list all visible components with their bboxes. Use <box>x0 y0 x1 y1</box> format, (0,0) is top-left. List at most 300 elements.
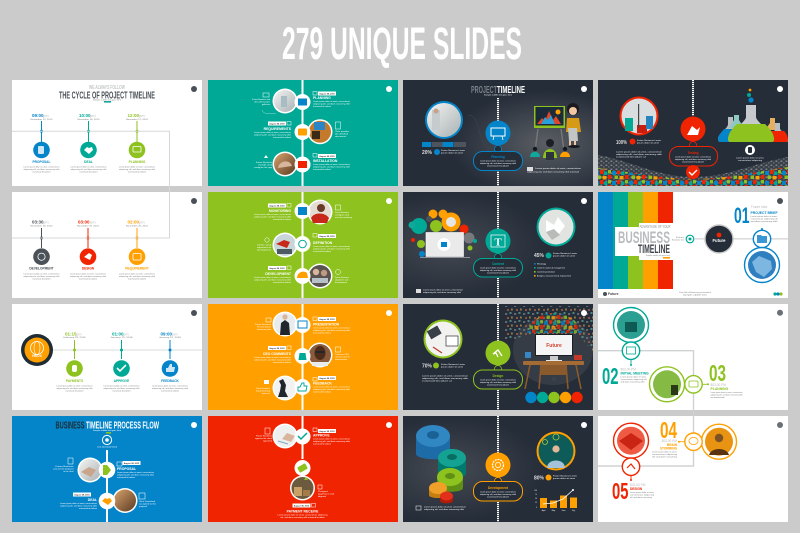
design pill: adipiscing elit, sed diam nonummy nibh <box>480 381 516 384</box>
milestone: design: November 19, 2015 <box>77 225 100 227</box>
logo badge <box>705 225 733 253</box>
milestone: deal: Lorem ipsum dolor sit amet, consectetuer <box>70 166 107 168</box>
planning pill: adipiscing elit, sed diam nonummy nibh <box>480 162 516 165</box>
testing pill: Testing <box>687 151 699 155</box>
milestone: proposal: euismod tincidunt <box>32 170 51 174</box>
step: feedback: Lorem ipsum dolor sit amet, consectetuer <box>313 386 350 388</box>
step: installation: Lorem ipsum dolor sit amet, consectetuer <box>313 163 350 166</box>
step: approve: APPROVE <box>313 434 330 438</box>
milestone: approve: adipiscing elit, sed diam nonummy nibh <box>104 387 140 390</box>
small teal icon: Future <box>676 236 685 239</box>
footer: Your look of Business presentation <box>679 291 711 294</box>
illustration: desk and monitor: Future <box>546 343 562 349</box>
panel: design slide <box>403 304 593 410</box>
step: ceo comments: adipiscing elit, sed diam nonummy nibh <box>254 358 291 362</box>
step: ceo comments: Customer CEO <box>335 353 349 356</box>
panel: teal timeline slide <box>208 80 398 186</box>
slide heading: BUSINESS <box>56 420 85 432</box>
settings dot <box>581 310 587 316</box>
step: proposal: to the client <box>64 470 74 473</box>
step: development: August 08, 2015 <box>269 267 285 270</box>
step: monitoring: configure and <box>335 214 349 216</box>
milestone: proposal: 09:00 <box>32 113 44 118</box>
cover title card: TIMELINE <box>638 244 670 256</box>
milestone: requirement: euismod tincidunt <box>128 278 146 280</box>
milestone: design: Lorem ipsum dolor sit amet, consectetuer <box>70 272 106 276</box>
step: deal: August 08, 2015 <box>74 494 90 496</box>
step: approve: approve the client <box>255 437 272 440</box>
step: proposal: adipiscing elit, sed diam nonummy nibh <box>117 474 154 476</box>
milestone: feedback: adipiscing elit, sed diam nonummy nibh <box>152 387 188 390</box>
percent and text: adipiscing elit, sed diam nonummy nibh <box>422 377 468 380</box>
step: requirements: adipiscing elit, sed diam nonummy nibh <box>254 134 291 136</box>
slide heading: TIMELINE PROCESS FLOW <box>86 420 159 432</box>
milestone: feedback: Lorem ipsum dolor sit amet, consectetuer <box>152 384 188 388</box>
start icon <box>97 435 117 448</box>
percent and list: Content creation & management <box>537 267 565 270</box>
small teal icon <box>672 235 694 243</box>
project brief heading: Lorem ipsum dolor sit amet, <box>750 215 778 218</box>
illustration: presenter and board <box>534 103 581 151</box>
settings dot <box>386 86 392 92</box>
step: planning: PLANNING <box>313 96 331 100</box>
percent and text: euismod tincidunt ut <box>422 380 453 382</box>
step 04: brain storming: $03.00 PM <box>662 439 677 443</box>
step: monitoring: Lorem ipsum dolor sit amet, consectetuer <box>254 213 291 216</box>
percent: ipsum dolor sit amet <box>553 477 576 480</box>
step: feedback: process <box>262 393 270 395</box>
caption: adipiscing elit, sed diam nonummy nibh <box>424 508 464 511</box>
slide heading: PROJECT <box>471 85 497 96</box>
percent and text <box>616 138 662 158</box>
step: planning: Future Business and <box>252 98 270 101</box>
milestone: payments: 01:15 <box>65 332 77 336</box>
milestone: planning <box>119 113 155 174</box>
panel: initial meeting and planning slide <box>598 304 788 410</box>
illustration: icon cloud <box>505 306 593 352</box>
start icon: Link download Used <box>97 446 117 448</box>
bar chart: 50 <box>535 498 537 500</box>
step: definition: adjustment of <box>257 246 272 249</box>
step: planning: plan <box>262 104 270 106</box>
step: ceo comments: demonstration <box>335 358 347 361</box>
milestone: proposal: adipiscing elit, sed diam nonummy nibh <box>24 168 60 171</box>
percent and list <box>534 252 577 278</box>
step 02: initial meeting: consectetuer adipiscing elit <box>620 378 647 381</box>
icon band <box>598 155 788 186</box>
illustration: desk and monitor <box>523 334 584 389</box>
percent and list: Strategy <box>537 263 546 266</box>
step: definition: Lorem ipsum dolor sit amet, consectetuer <box>313 245 350 248</box>
development pill: Development <box>488 486 509 490</box>
bar chart: 25 <box>535 502 537 504</box>
settings dot <box>581 86 587 92</box>
milestone: approve: pm <box>123 332 129 336</box>
step 02: initial meeting: $03.00 PM <box>620 368 636 372</box>
step 03: planning: euismod <box>710 397 724 399</box>
step: planning: August 08, 2015 <box>319 92 335 96</box>
project brief heading: Future Idea <box>751 205 768 209</box>
percent and text: Future Business Lorem <box>637 139 661 142</box>
percent and text: ipsum dolor sit amet <box>637 142 660 144</box>
milestone: feedback: euismod tincidunt <box>161 390 179 392</box>
milestone: requirement <box>119 220 155 280</box>
panel: brain storming and design slide <box>598 416 788 522</box>
step: ceo comments: August 08, 2015 <box>269 347 285 350</box>
step 05: design: consectetuer adipiscing <box>630 494 654 496</box>
testing pill: euismod tincidunt <box>682 160 705 164</box>
illustration: bubbles and laptop <box>408 210 477 258</box>
content pill <box>474 258 522 277</box>
slide heading: TIMELINE <box>497 85 525 96</box>
small teal icon: Business text <box>672 238 684 242</box>
panel: development gears slide <box>403 416 593 522</box>
milestone: payments <box>56 332 93 392</box>
settings dot <box>581 198 587 204</box>
milestone: development: euismod tincidunt <box>32 278 51 280</box>
caption: Lorem ipsum dolor sit amet, consectetuer <box>424 506 466 508</box>
cover title card: Sample subtitle text goes here <box>646 254 671 257</box>
step: presentation: adipiscing elit, sed diam nonummy nibh <box>313 329 350 332</box>
development pill: Lorem ipsum dolor sit amet, consectetuer <box>480 490 516 494</box>
step: requirements: REQUIREMENTS <box>264 127 292 131</box>
step: payment receive <box>278 460 334 519</box>
milestone: proposal: PROPOSAL <box>33 160 50 164</box>
step: payment receive: PAYMENT RECEIVE <box>287 510 319 514</box>
milestone: proposal: pm <box>43 113 49 118</box>
settings dot <box>581 422 587 428</box>
project brief heading: consectetuer adipiscing elit <box>750 218 778 220</box>
testing pill <box>670 146 718 166</box>
panel: development design requirement slide <box>12 192 202 298</box>
step: monitoring: euismod tincidunt <box>273 218 291 221</box>
step: monitoring: MONITORING <box>269 209 291 213</box>
step: planning: adipiscing elit, sed diam nonummy nibh <box>313 102 350 106</box>
footer: Future <box>608 292 619 296</box>
percent and text: 100% <box>616 140 627 146</box>
panel: HBOX timeline slide <box>12 304 202 410</box>
step: payment receive: payment and <box>318 492 334 496</box>
step 04: brain storming: BRAIN <box>667 443 678 447</box>
settings dot <box>777 310 783 316</box>
step: deal: euismod tincidunt <box>79 507 97 510</box>
caption <box>416 506 466 511</box>
step: deal: accepted to the <box>139 502 157 506</box>
milestone: planning: Lorem ipsum dolor sit amet, consectetuer <box>119 166 155 168</box>
content pill: adipiscing elit, sed diam nonummy nibh <box>480 269 516 272</box>
percent and list: Content promotion <box>537 271 555 274</box>
title: 279 UNIQUE SLIDES <box>282 18 522 69</box>
step 04: brain storming: consectetuer adipiscing <box>652 453 677 456</box>
panel: testing laboratory slide <box>598 80 788 186</box>
photo: content <box>536 208 576 246</box>
panel: green timeline slide <box>208 192 398 298</box>
step: requirements <box>254 119 349 144</box>
percent and text <box>422 362 468 382</box>
milestone: approve: January 15, 2016 <box>110 337 134 339</box>
design pill: euismod tincidunt <box>487 384 510 386</box>
caption: adipiscing elit, sed diam nonummy nibh euismod <box>527 170 579 174</box>
step: definition: development <box>257 248 272 252</box>
settings dot <box>777 198 783 204</box>
milestone: feedback: 09:00 <box>160 332 173 336</box>
milestone: requirement: REQUIREMENT <box>125 266 149 270</box>
step: development: development <box>335 281 347 284</box>
milestone: approve: APPROVE <box>114 379 129 383</box>
percent and list: Analytics, measurement & improvement <box>537 275 571 278</box>
percent and text: Future Business Lorem <box>441 363 465 366</box>
slide heading <box>56 420 159 434</box>
milestone: development: November 18, 2015 <box>30 225 54 227</box>
step: deal <box>60 488 157 513</box>
development pill: euismod tincidunt <box>487 496 510 498</box>
percent and text: 70% <box>422 364 432 370</box>
milestone: feedback: January 15, 2016 <box>159 337 182 339</box>
milestone: payments: February 24, 2016 <box>64 337 87 339</box>
step: requirements: the detailed <box>335 132 348 136</box>
step 04: brain storming: Lorem ipsum dolor sit amet, <box>652 450 677 454</box>
step: presentation: Lorem ipsum dolor sit amet, consectetuer <box>313 326 350 330</box>
step 03: planning <box>650 360 743 402</box>
step: requirements: August 08, 2015 <box>269 122 285 126</box>
milestone: deal: adipiscing elit, sed diam nonummy nibh <box>70 168 106 171</box>
development pill: adipiscing elit, sed diam nonummy nibh <box>480 493 516 496</box>
panel: orange timeline slide <box>208 304 398 410</box>
bar chart: 75 <box>535 494 537 496</box>
percent and text: adipiscing elit, sed diam nonummy nibh <box>616 153 662 156</box>
step: presentation: Future Business <box>255 323 271 326</box>
settings dot <box>191 86 197 92</box>
step: presentation: PRESENTATION <box>313 322 340 326</box>
step: approve: Lorem ipsum dolor sit amet, consectetuer <box>313 438 350 440</box>
milestone: requirement: 02:00 <box>128 220 140 224</box>
step: planning <box>252 88 350 114</box>
settings dot <box>191 422 197 428</box>
caption <box>527 167 581 174</box>
milestone: approve: 01:00 <box>112 332 124 336</box>
settings dot <box>386 310 392 316</box>
step: monitoring: Future Business <box>335 211 349 214</box>
step: payment receive: August 08, 2015 <box>294 504 310 508</box>
step: definition: euismod tincidunt <box>313 250 331 253</box>
percent and text: Lorem ipsum dolor sit amet, consectetuer <box>616 150 662 154</box>
milestone: payments: adipiscing elit, sed diam nonummy nibh <box>56 387 92 390</box>
project brief heading: PROJECT BRIEF <box>750 211 778 215</box>
step: proposal: process the proposal <box>54 468 74 470</box>
design pill: Design <box>493 374 503 378</box>
settings dot <box>777 422 783 428</box>
percent and list: ipsum dolor sit amet <box>553 254 576 258</box>
logo badge: Future <box>712 238 726 243</box>
milestone: deal: 10:00 <box>79 113 91 118</box>
design pill <box>474 370 522 389</box>
step: feedback: euismod tincidunt <box>313 390 331 394</box>
step: feedback: adipiscing elit, sed diam nonummy nibh <box>313 388 350 391</box>
step: presentation: Presentation <box>257 326 271 328</box>
step: development: DEVELOPMENT <box>265 272 292 276</box>
blue folder node <box>753 228 771 248</box>
milestone: approve <box>104 332 140 392</box>
milestone: approve: euismod tincidunt <box>112 390 131 392</box>
percent and text: ipsum dolor sit amet <box>441 366 464 368</box>
step: presentation: August 08, 2015 <box>319 318 335 321</box>
milestone: payments: PAYMENTS <box>66 379 83 383</box>
step: payment receive: elit, sed diam nonummy nibh euismod tincidunt <box>280 516 325 519</box>
step: approve: euismod tincidunt <box>313 442 331 446</box>
step: definition: August 08, 2015 <box>319 235 335 238</box>
milestone: deal: pm <box>90 113 96 118</box>
milestone: planning: pm <box>139 113 145 118</box>
bar chart: April <box>542 509 546 512</box>
milestone: development <box>24 220 60 280</box>
milestone: development: adipiscing elit, sed diam nonummy nibh <box>24 275 60 278</box>
panel: content slide <box>403 192 593 298</box>
step 04: brain storming <box>652 417 736 459</box>
step: requirements: euismod tincidunt <box>273 136 291 139</box>
step 02: initial meeting: INITIAL MEETING <box>620 372 649 376</box>
step: development: adipiscing elit, sed diam nonummy nibh <box>254 278 291 282</box>
connector curves <box>468 115 528 149</box>
T node <box>486 228 510 260</box>
milestone: requirement: pm <box>139 220 145 224</box>
step: ceo comments: euismod tincidunt <box>273 361 291 364</box>
step: definition <box>257 232 350 258</box>
step: development: euismod tincidunt <box>273 281 291 284</box>
cover title card <box>615 223 673 260</box>
step 05: design <box>612 423 654 504</box>
milestone: design <box>70 220 106 280</box>
step 05: design: 05 <box>612 478 629 504</box>
planning pill <box>474 152 522 170</box>
footer <box>603 291 783 296</box>
step: deal: Clinic Download <box>139 501 155 503</box>
percent and list: Future Business Lorem <box>553 252 577 255</box>
step: ceo comments: CEO COMMENTS <box>263 352 292 356</box>
step: installation: adipiscing elit, sed diam nonummy nibh <box>313 166 350 168</box>
percent <box>534 474 577 482</box>
step: approve: August 08, 2015 <box>319 430 335 433</box>
project brief heading <box>734 203 778 228</box>
tabs and percent: ipsum dolor sit amet <box>441 152 464 154</box>
project brief heading: sed diam nonummy nibh <box>750 221 778 223</box>
caption: Lorem ipsum dolor sit amet, consectetuer <box>423 288 463 292</box>
step: installation: install and <box>258 164 272 166</box>
milestone: requirement: November 20, 2015 <box>126 225 149 227</box>
bar chart: 100 <box>534 490 537 492</box>
step: monitoring <box>254 200 352 224</box>
milestone: approve: Lorem ipsum dolor sit amet, consectetuer <box>104 384 140 388</box>
step: development <box>254 264 349 288</box>
step: installation: August 08, 2015 <box>319 155 335 158</box>
step: approve: approval <box>263 440 273 442</box>
milestone: development: pm <box>43 220 49 224</box>
step: proposal <box>54 458 154 482</box>
planning node <box>486 120 510 152</box>
milestone: requirement: Lorem ipsum dolor sit amet, consectetuer <box>119 272 155 276</box>
milestone: proposal <box>24 113 60 174</box>
colour stripes <box>598 192 673 289</box>
step: feedback: Client Feedback <box>256 387 270 390</box>
step 03: planning: 03 <box>709 360 726 386</box>
step: ceo comments <box>254 342 351 368</box>
step: installation: configure the app <box>254 166 273 169</box>
step: planning: Lorem ipsum dolor sit amet, consectetuer <box>313 100 350 103</box>
milestone: deal <box>70 113 107 174</box>
step: feedback <box>256 376 350 400</box>
panel: business timeline process flow slide <box>12 416 202 522</box>
settings dot <box>191 310 197 316</box>
step 03: planning: Lorem ipsum dolor sit amet, consectetuer <box>710 391 743 394</box>
step: development: Future Business <box>335 276 349 279</box>
step: planning: euismod tincidunt <box>313 105 331 108</box>
panel: red timeline slide <box>208 416 398 522</box>
milestone: payments: euismod tincidunt <box>66 390 84 392</box>
percent: 80% <box>534 476 544 482</box>
step: presentation: business plan <box>257 329 271 331</box>
percent and text: Lorem ipsum dolor sit amet, consectetuer <box>422 374 468 378</box>
step 02: initial meeting: sed diam nonummy nibh <box>620 382 644 384</box>
milestone: feedback: pm <box>172 332 178 336</box>
step: definition: adipiscing elit, sed diam nonummy nibh <box>313 248 350 250</box>
flask caption: Lorem ipsum dolor sit amet, <box>736 156 764 160</box>
step: presentation <box>255 312 350 336</box>
step: installation: Future Business <box>256 161 272 164</box>
flask caption <box>736 145 764 162</box>
step 05: design: $03.00 PM <box>630 483 646 487</box>
step: feedback: August 08, 2015 <box>319 377 335 380</box>
step: presentation: euismod tincidunt <box>313 332 331 334</box>
milestone: deal: DEAL <box>84 160 93 164</box>
footer: Sample subtitle here <box>683 294 708 296</box>
slide heading: WE ALWAYS FOLLOW <box>89 85 125 91</box>
milestone: payments: pm <box>76 332 82 336</box>
content pill: euismod tincidunt <box>487 272 510 274</box>
percent: Future Business Lorem <box>553 474 577 478</box>
tabs and percent <box>422 142 466 156</box>
illustration: gears <box>416 425 466 503</box>
check icon <box>686 165 700 179</box>
connector line <box>695 238 788 240</box>
step: feedback: FEEDBACK <box>313 382 332 386</box>
step 02: initial meeting: Lorem ipsum dolor sit amet, <box>620 376 647 378</box>
milestone: deal: November 16, 2015 <box>78 119 101 121</box>
hub icon <box>21 334 53 366</box>
bar chart: June <box>562 510 565 512</box>
milestone: planning: November 17, 2015 <box>126 119 149 121</box>
step: installation: euismod tincidunt <box>313 168 331 171</box>
step: installation <box>254 152 350 176</box>
step: payment receive: Project <box>318 490 329 493</box>
planning pill: Planning <box>491 155 505 159</box>
bar chart: 0 <box>536 507 537 509</box>
panel: business timeline cover slide <box>598 192 788 298</box>
step: requirements: document <box>335 135 347 138</box>
milestone: development: Lorem ipsum dolor sit amet, consectetuer <box>24 272 60 276</box>
planning pill: Lorem ipsum dolor sit amet, consectetuer <box>480 160 516 162</box>
milestone: feedback <box>152 332 188 392</box>
design node <box>486 340 510 372</box>
step: approve: adipiscing elit, sed diam nonummy nibh <box>313 440 350 443</box>
testing pill: Lorem ipsum dolor sit amet, consectetuer <box>675 156 711 158</box>
testing pill: adipiscing elit, sed diam nonummy nibh <box>675 158 711 161</box>
slide heading: Sample subtitle text goes here <box>93 429 122 432</box>
cover title card: BUSINESS <box>618 229 670 247</box>
milestone: payments: Lorem ipsum dolor sit amet, consectetuer <box>56 384 93 388</box>
settings dot <box>386 198 392 204</box>
step: planning: client all the project <box>254 100 270 104</box>
step: definition: DEFINITION <box>313 241 333 245</box>
settings dot <box>777 86 783 92</box>
